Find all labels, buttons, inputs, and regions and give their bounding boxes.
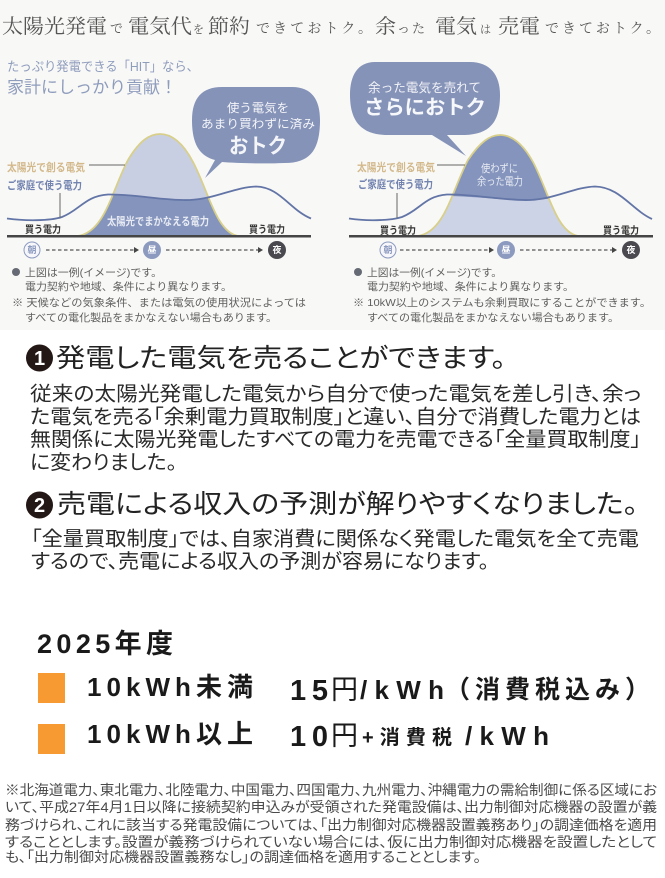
row: under 10kWh: /kWh: [360, 675, 444, 705]
left area chart: [7, 130, 311, 238]
section 1 body: た電気を売る「余剰電力買取制度」と違い、自分で消費した電力とは: [30, 406, 641, 428]
left notes: 上図は一例(イメージ)です。: [25, 266, 162, 279]
section 2 heading: 売電による収入の予測が解りやすくなりました。: [57, 489, 638, 519]
section 1 body: 無関係に太陽光発電したすべての電力を売電できる「全量買取制度」: [30, 428, 641, 451]
right timeline: 朝: [383, 244, 393, 255]
right callout bubble: さらにおトク: [364, 96, 486, 119]
right area chart: [349, 130, 653, 238]
section 2 heading: 2: [34, 495, 45, 517]
row: 10kWh and over: [38, 719, 549, 754]
row: under 10kWh: （消費税込み）: [445, 676, 650, 704]
right area chart: 買う電力: [380, 224, 416, 237]
section 1 heading: 発電した電気を売ることができます。: [56, 343, 506, 373]
section 1: [26, 343, 641, 474]
title: 売電: [498, 15, 540, 38]
panel: right chart: [349, 62, 653, 324]
row: under 10kWh: 10kWh未満: [87, 672, 253, 702]
left notes: ※ 天候などの気象条件、または電気の使用状況によっては: [12, 296, 306, 309]
right timeline: 夜: [626, 244, 636, 255]
left callout bubble: あまり買わずに済み: [201, 117, 315, 131]
footnote: も、「出力制御対応機器設置義務なし」の調達価格を適用することとします。: [5, 849, 481, 865]
title: 電気代: [128, 15, 192, 38]
footnote: [5, 782, 657, 865]
left timeline: 夜: [272, 244, 282, 255]
left panel heading: [7, 59, 199, 97]
right notes: 上図は一例(イメージ)です。: [367, 266, 502, 279]
panel: left chart: [7, 59, 320, 324]
right callout bubble: [350, 62, 500, 156]
section 1 body: に変わりました。: [30, 451, 177, 474]
left area chart: 買う電力: [25, 223, 61, 236]
left panel heading: 家計にしっかり貢献！: [7, 78, 177, 97]
left notes: [12, 266, 306, 324]
section 2 body: 「全量買取制度」では、自家消費に関係なく発電した電気を全て売電: [31, 528, 639, 550]
title: できておトク。: [256, 22, 372, 37]
right area chart: 買う電力: [603, 224, 639, 237]
right area chart: 使わずに: [481, 162, 518, 175]
section 1 body: [30, 382, 641, 474]
left callout bubble: 使う電気を: [227, 100, 289, 115]
title: [2, 15, 660, 38]
right notes: [353, 266, 651, 324]
left callout bubble: [192, 87, 320, 178]
row: 10kWh and over: +消費税: [362, 726, 452, 749]
section 2 body: [31, 528, 639, 573]
row: 10kWh and over: /kWh: [465, 721, 549, 751]
footnote: することとします。設置が義務づけられていない場合には、仮に出力制御対応機器を設置したとして: [5, 834, 657, 850]
right notes: 電力契約や地域、条件により異なります。: [367, 280, 574, 293]
title: 太陽光発電: [2, 15, 107, 38]
row: 10kWh and over: 円: [331, 721, 358, 751]
row: under 10kWh: [38, 672, 650, 707]
row: 10kWh and over: 10kWh以上: [87, 719, 253, 749]
left timeline: [24, 241, 286, 259]
right callout bubble: 余った電気を売れて: [368, 80, 481, 95]
footnote: いて、平成27年4月1日以降に接続契約申込みが受領された発電設備は、出力制御対応機器の設置が義: [5, 799, 657, 815]
left area chart: ご家庭で使う電力: [7, 178, 82, 192]
row: under 10kWh: 円: [331, 675, 358, 705]
footnote: ※北海道電力、東北電力、北陸電力、中国電力、四国電力、九州電力、沖縄電力の需給制御に係る区域にお: [5, 782, 657, 798]
section 2: [26, 489, 639, 573]
title: 節約: [208, 15, 250, 38]
right area chart: ご家庭で使う電力: [358, 177, 433, 191]
left area chart: 買う電力: [249, 223, 285, 236]
row: 10kWh and over: 10: [290, 721, 328, 753]
row: under 10kWh: 15: [290, 675, 328, 707]
right area chart: 太陽光で創る電気: [357, 160, 435, 174]
title: 余: [375, 15, 396, 38]
left notes: 電力契約や地域、条件により異なります。: [25, 280, 232, 293]
title: 電気: [435, 15, 477, 38]
left timeline: 昼: [147, 245, 157, 255]
title: は: [480, 24, 491, 36]
right timeline: 昼: [501, 245, 511, 255]
section 2 body: するので、売電による収入の予測が容易になります。: [31, 550, 489, 573]
right timeline: [380, 241, 640, 259]
right notes: ※ 10kW以上のシステムも余剰買取にすることができます。: [353, 296, 651, 309]
price table: [37, 629, 650, 754]
footnote: 務づけられ、これに該当する発電設備については、「出力制御対応機器設置義務あり」の調達価格を適用: [5, 817, 657, 833]
left area chart: 太陽光でまかなえる電力: [107, 214, 209, 228]
year heading: 2025年度: [37, 629, 173, 659]
right area chart: 余った電力: [477, 175, 523, 188]
section 1 body: 従来の太陽光発電した電気から自分で使った電気を差し引き、余っ: [30, 382, 641, 406]
title: った: [397, 21, 425, 36]
left area chart: 太陽光で創る電気: [7, 160, 85, 174]
title: を: [193, 23, 204, 36]
left callout bubble: おトク: [229, 135, 287, 158]
title: で: [110, 21, 123, 36]
right notes: すべての電化製品をまかなえない場合もあります。: [367, 311, 619, 324]
left timeline: 朝: [27, 244, 37, 255]
left notes: すべての電化製品をまかなえない場合もあります。: [25, 311, 277, 324]
section 1 heading: 1: [34, 348, 45, 370]
title: できておトク。: [545, 22, 660, 37]
left panel heading: たっぷり発電できる「HIT」なら、: [7, 59, 199, 74]
